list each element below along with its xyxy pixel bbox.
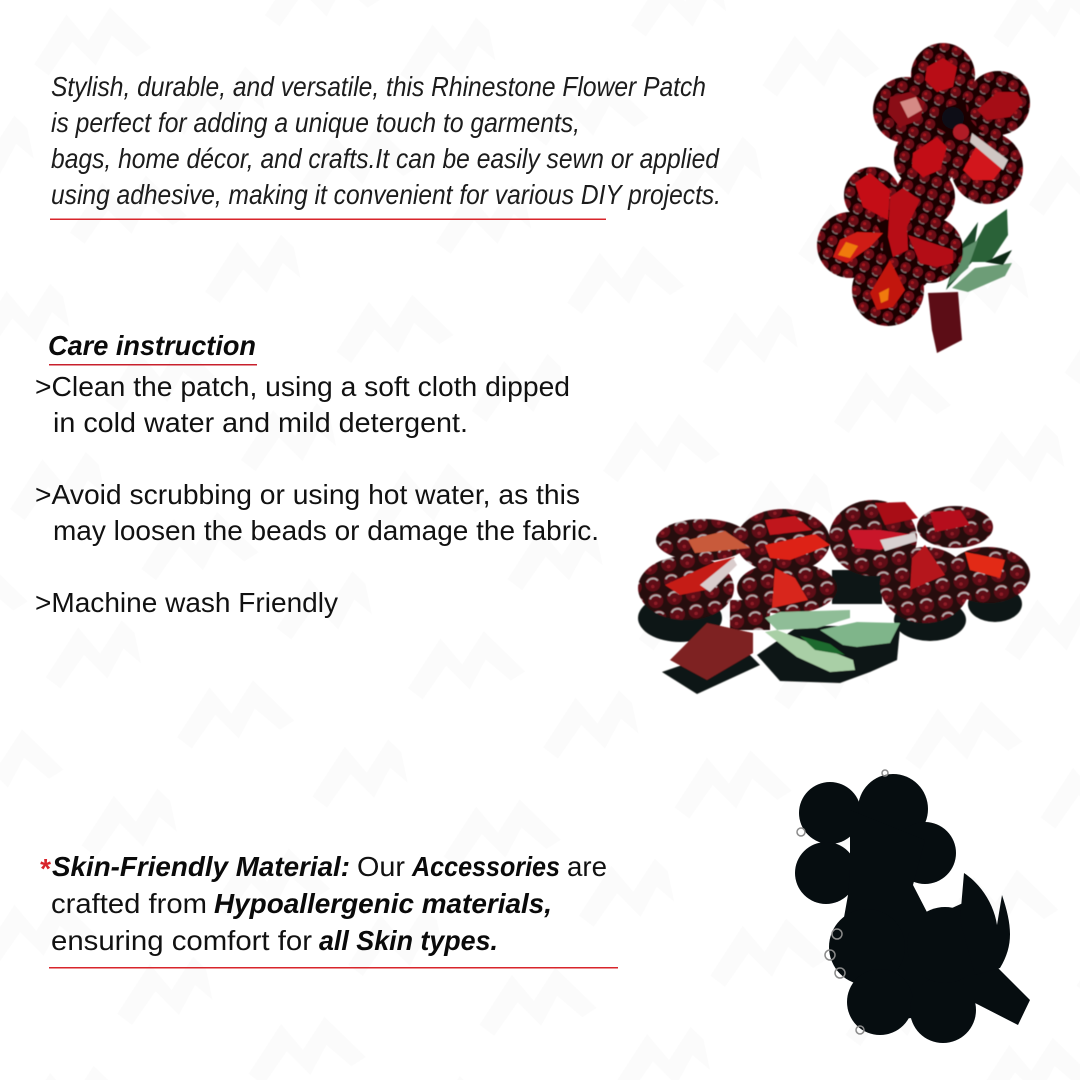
text block: skin-friendly material: Skin-Friendly Material: [52,851,350,882]
text block: skin-friendly material: Hypoallergenic materials, [214,888,552,919]
text block: care steps: in cold water and mild detergent. [53,407,468,438]
leaves [946,209,1012,292]
upper flower silhouette [900,70,1005,195]
text block: product description [50,71,721,220]
text block: product description: using adhesive, making it convenient for various DIY projects. [51,179,721,210]
red gems [833,58,1023,310]
stem [928,292,962,353]
text block: care steps [35,371,599,618]
text block: skin-friendly material: ensuring comfort for [51,925,312,956]
brick stem [670,623,753,680]
stray beads [797,770,888,1034]
green gems [765,610,900,672]
lower flower petals [817,167,963,326]
text block: skin-friendly material [39,851,618,968]
text block: product description: Stylish, durable, and versatile, this Rhinestone Flower Patch [51,71,706,102]
lower flower silhouette [845,180,955,300]
text block: care steps: >Avoid scrubbing or using hot water, as this [35,479,580,510]
gems [665,502,1005,608]
heading: care instruction: Care instruction [48,330,256,361]
upper flower petals [873,43,1030,204]
text block: skin-friendly material: all Skin types. [319,925,498,956]
text block: skin-friendly material: crafted from [51,888,207,919]
bead clusters [638,500,1030,630]
text block: product description: bags, home décor, and crafts.It can be easily sewn or applied [51,143,720,174]
text block: care steps: may loosen the beads or damage the fabric. [53,515,599,546]
photo: patch side view [638,500,1030,694]
text block: care steps: >Machine wash Friendly [35,587,338,618]
text block: skin-friendly material: * [39,853,51,884]
text block: skin-friendly material: are [567,851,607,882]
text block: skin-friendly material: Our [357,851,405,882]
photo: rhinestone flower patch front [817,43,1030,353]
text block: skin-friendly material: Accessories [411,851,560,882]
text block: product description: is perfect for adding a unique touch to garments, [51,107,580,138]
black felt base [638,570,1022,694]
text block: care steps: >Clean the patch, using a soft cloth dipped [35,371,570,402]
photo: patch back [795,770,1030,1043]
